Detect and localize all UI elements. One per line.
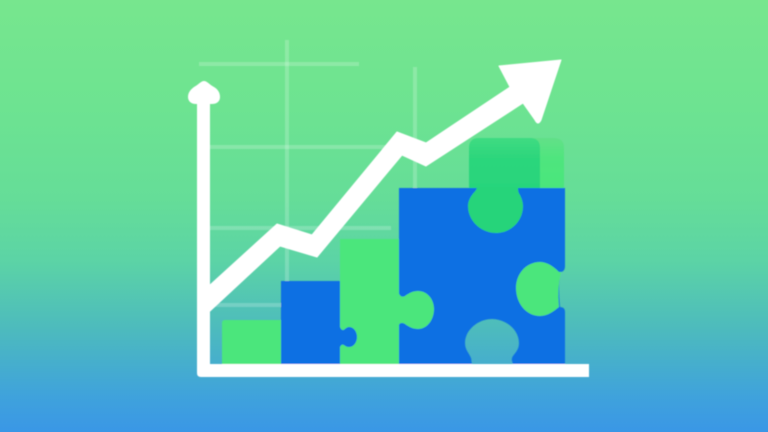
- y axis with arrow head: [188, 81, 220, 370]
- top block dark part: [469, 138, 540, 189]
- y axis line: [197, 100, 210, 370]
- puzzle knob: left green tab: [398, 290, 434, 329]
- chart group: [188, 40, 589, 377]
- puzzle knob: top green tab: [468, 187, 523, 233]
- rising trend arrow: [210, 60, 561, 311]
- top block light part: [469, 138, 564, 189]
- bar: tall green puzzle piece: [340, 239, 399, 364]
- bar: blue puzzle piece with knob: [281, 281, 357, 364]
- y axis head: [188, 81, 220, 104]
- puzzle piece: large blue block with notches: [399, 188, 565, 364]
- puzzle piece: top green block: [469, 138, 564, 189]
- puzzle knob: right green tab: [516, 262, 561, 316]
- x axis: [197, 364, 589, 377]
- bar: small green: [222, 320, 281, 364]
- background grid lines: [199, 40, 415, 305]
